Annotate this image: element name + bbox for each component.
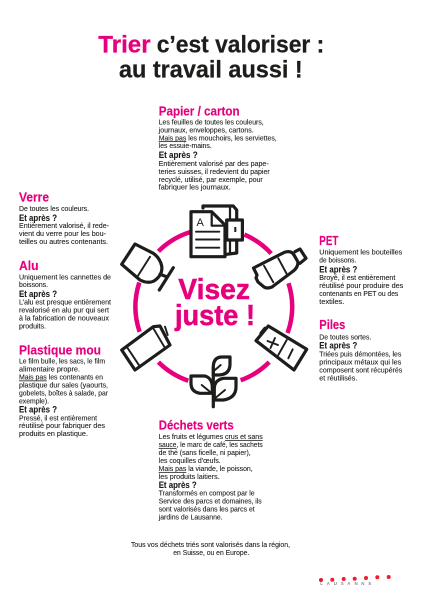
text block: papier accepted: journaux, enveloppes, cartons. [158, 127, 254, 134]
text block: plastique accepted: alimentaire propre. [19, 366, 80, 374]
text block: verre after: teilles ou autres contenants. [19, 239, 108, 246]
title: Trier [98, 31, 151, 58]
text block: alu accepted: Uniquement les cannettes de [19, 274, 111, 281]
icon: plant [191, 357, 236, 407]
panel: PET [319, 233, 404, 306]
text block: déchets verts accepted: Les fruits et légumes crus et sans [159, 434, 263, 441]
text block: verre after [19, 223, 109, 246]
text block: déchets verts after: Transformés en compost par le [159, 491, 255, 498]
text block: verre accepted: De toutes les couleurs. [19, 206, 89, 213]
text block: plastique accepted: plastique dur sales (yaourts, [19, 382, 108, 389]
text block: déchets verts accepted: les produits laitiers. [159, 474, 220, 481]
text block: papier after: Entièrement valorisé par des pape- [159, 161, 269, 168]
text block: piles after: et réutilisés. [319, 376, 357, 382]
text block: alu after [19, 300, 111, 330]
text block: déchets verts accepted: sauce, le marc de café, les sachets [159, 442, 263, 449]
heading: piles: Piles [319, 317, 345, 332]
text block: déchets verts accepted: de thé (sans ficelle, ni papier), [159, 450, 251, 457]
text block: déchets verts after [158, 491, 262, 522]
heading: déchets verts: Déchets verts [159, 417, 234, 432]
text block: alu accepted [19, 274, 111, 289]
heading: plastique mou: Plastique mou [19, 342, 101, 357]
logo: ville de lausanne [319, 575, 391, 586]
text block: déchets verts after: sont valorisés dans les parcs et [159, 506, 255, 514]
text block: plastique accepted: gobelets, boîtes à salade, par [19, 390, 109, 397]
text block: PET after: contenants en PET ou des [319, 291, 399, 298]
text block: plastique after: produits en plastique. [19, 431, 88, 438]
text block: déchets verts after: jardins de Lausanne. [158, 514, 223, 522]
icon: paper documents: A [196, 217, 204, 229]
title: au travail aussi ! [119, 57, 303, 84]
text block: verre after: Entièrement valorisé, il rede- [19, 223, 109, 230]
text block: papier accepted: Les feuilles de toutes les couleurs, [159, 120, 264, 126]
text block: déchets verts after: Service des parcs et domaines, ils [159, 498, 262, 506]
text block: papier accepted [158, 120, 277, 150]
subheading: et après: Et après ? [19, 213, 57, 223]
text block: piles after: principaux métaux qui les [319, 360, 402, 366]
text block: PET after: textiles. [319, 299, 344, 306]
text block: déchets verts accepted: Mais pas la viande, le poisson, [159, 466, 253, 473]
text block: papier accepted: Mais pas les mouchoirs, les serviettes, [159, 135, 277, 142]
text block: alu after: produits. [19, 323, 46, 330]
panel: papier / carton [158, 104, 277, 192]
title: c’est valoriser : [157, 31, 324, 58]
center text: visez juste: Visez [178, 274, 250, 306]
subheading: et après: Et après ? [159, 150, 198, 160]
title [98, 31, 324, 84]
text block: alu after: L’alu est presque entièrement [19, 300, 111, 307]
magenta ring segments [135, 232, 292, 381]
text block: verre after: vient du verre pour les bou- [19, 231, 106, 238]
text block: PET accepted [319, 250, 403, 264]
icon: bottle [254, 249, 306, 288]
text block: plastique accepted [19, 359, 109, 405]
text block: piles after: composent sont récupérés [319, 368, 403, 374]
subheading: et après: Et après ? [19, 405, 57, 415]
subheading: et après: Et après ? [319, 340, 357, 350]
footer note [131, 542, 290, 557]
subheading: et après: Et après ? [319, 264, 357, 274]
panel: piles [319, 317, 403, 382]
heading: alu: Alu [19, 258, 38, 273]
text block: plastique after: Pressé, il est entièrement [19, 415, 97, 422]
panel: verre [19, 190, 109, 246]
text block: papier after: fabriquer les journaux. [159, 185, 231, 192]
panel: déchets verts [158, 417, 263, 522]
text block: PET after: réutilisé pour produire des [319, 283, 404, 290]
text block: piles accepted: De toutes sortes. [319, 334, 371, 341]
center text: visez juste [174, 274, 255, 332]
text block: plastique after: réutilisé pour fabriquer des [19, 423, 106, 430]
ring diagram [122, 206, 307, 407]
text block: alu after: revalorisé en alu pur qui sert [19, 308, 109, 314]
text block: piles after [319, 352, 403, 382]
center text: visez juste: juste ! [174, 300, 255, 332]
text block: papier after [159, 161, 270, 192]
logo: ville de lausanne: LAUSANNE [320, 581, 372, 586]
text block: PET accepted: Uniquement les bouteilles [319, 250, 403, 257]
icon: wine glass [122, 244, 173, 290]
text block: alu after: à la fabrication de nouveaux [19, 316, 110, 322]
heading: verre: Verre [19, 190, 49, 205]
text block: déchets verts accepted: les coquilles d’œufs. [159, 458, 221, 465]
footer note: en Suisse, ou en Europe. [173, 550, 249, 557]
text block: piles after: Triées puis démontées, les [319, 352, 402, 359]
heading: papier / carton: Papier / carton [159, 104, 240, 118]
icon: can [122, 326, 170, 370]
heading: PET: PET [319, 233, 338, 248]
panel: plastique mou [19, 342, 109, 438]
text block: PET after [319, 275, 404, 306]
text block: PET after: Broyé, il est entièrement [319, 275, 395, 282]
text block: plastique accepted: exemple). [19, 398, 49, 405]
text block: déchets verts accepted [159, 434, 263, 481]
text block: alu accepted: boissons. [19, 282, 48, 289]
text block: plastique after [19, 415, 106, 438]
text block: papier accepted: les essuie-mains. [159, 143, 212, 150]
text block: PET accepted: de boissons. [319, 258, 356, 264]
text block: papier after: recyclé, utilisé, par exemple, pour [159, 177, 263, 184]
icon: paper documents [191, 206, 242, 257]
subheading: et après: Et après ? [159, 480, 197, 490]
text block: plastique accepted: Mais pas les contenants en [19, 374, 103, 382]
icon: battery [256, 326, 307, 370]
text block: papier after: teries suisses, il redevient du papier [159, 169, 270, 176]
footer note: Tous vos déchets triés sont valorisés dans la région, [131, 542, 290, 549]
panel: alu [19, 258, 111, 330]
text block: plastique accepted: Le film bulle, les sacs, le film [19, 359, 105, 366]
subheading: et après: Et après ? [19, 289, 57, 299]
